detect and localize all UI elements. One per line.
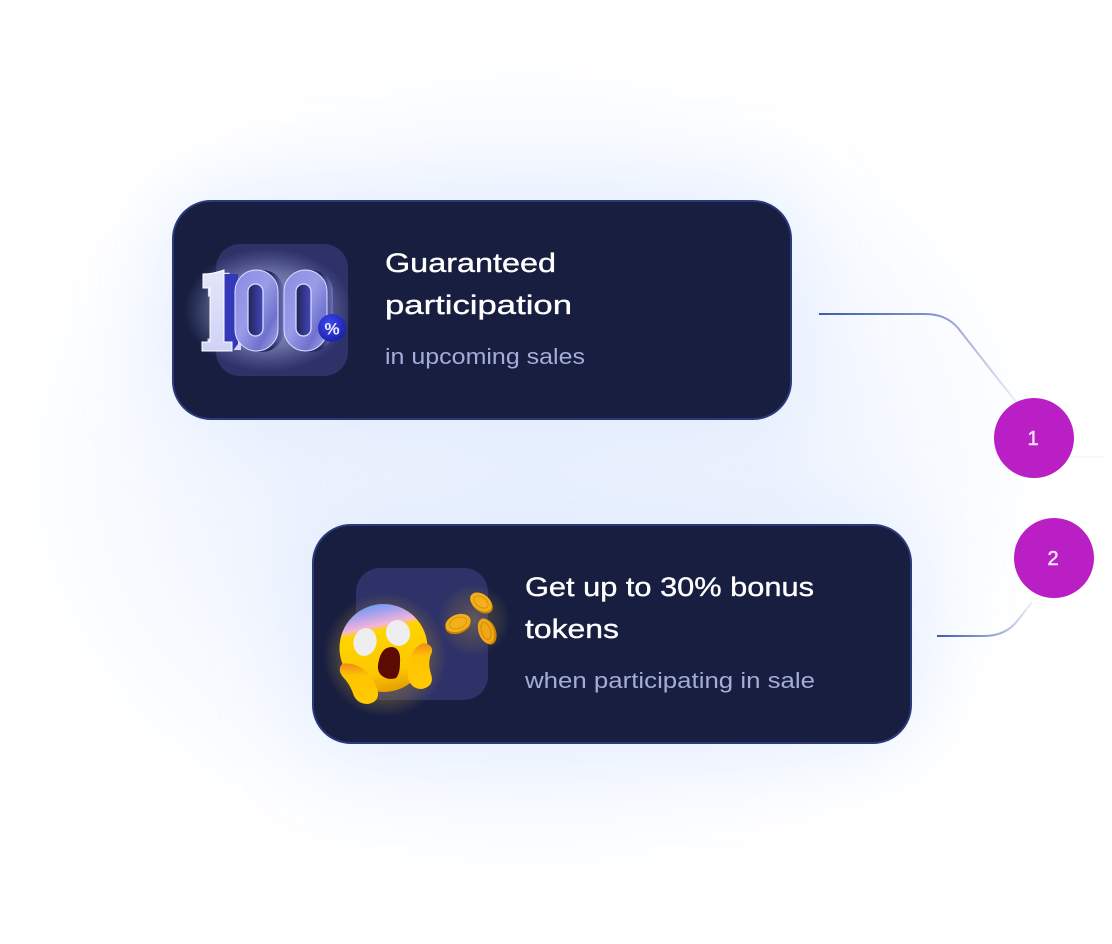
panel: bonus tokens (313, 525, 911, 743)
digit zero (235, 270, 284, 352)
subtext: in upcoming sales (385, 344, 585, 369)
coins (443, 589, 500, 647)
heading: tokens (525, 614, 619, 644)
panel: guaranteed participation (173, 201, 791, 419)
subtext: when participating in sale (524, 668, 815, 693)
card shadows (172, 200, 912, 744)
heading: Guaranteed (385, 248, 556, 278)
icon: shocked emoji with coins (323, 568, 510, 717)
face (340, 604, 432, 704)
faint connector stub (1070, 456, 1104, 458)
digit zero (284, 270, 333, 352)
connector line 2 (937, 602, 1032, 636)
badge 1 (994, 398, 1074, 478)
icon: 100 percent (184, 244, 352, 376)
heading: participation (385, 290, 572, 320)
icon: 100 percent: 0 (235, 249, 279, 374)
heading (525, 572, 814, 644)
icon: 100 percent: % (324, 320, 340, 338)
digit one (202, 270, 238, 352)
badge 1: 1 (1027, 428, 1039, 450)
heading: Get up to 30% bonus (525, 572, 814, 602)
connector line 1 (819, 314, 1016, 402)
heading (385, 248, 572, 320)
badge 2 (1014, 518, 1094, 598)
badge 2: 2 (1047, 548, 1059, 570)
icon: 100 percent: 0 (282, 249, 326, 374)
icon: 100 percent: 1 (203, 249, 243, 374)
